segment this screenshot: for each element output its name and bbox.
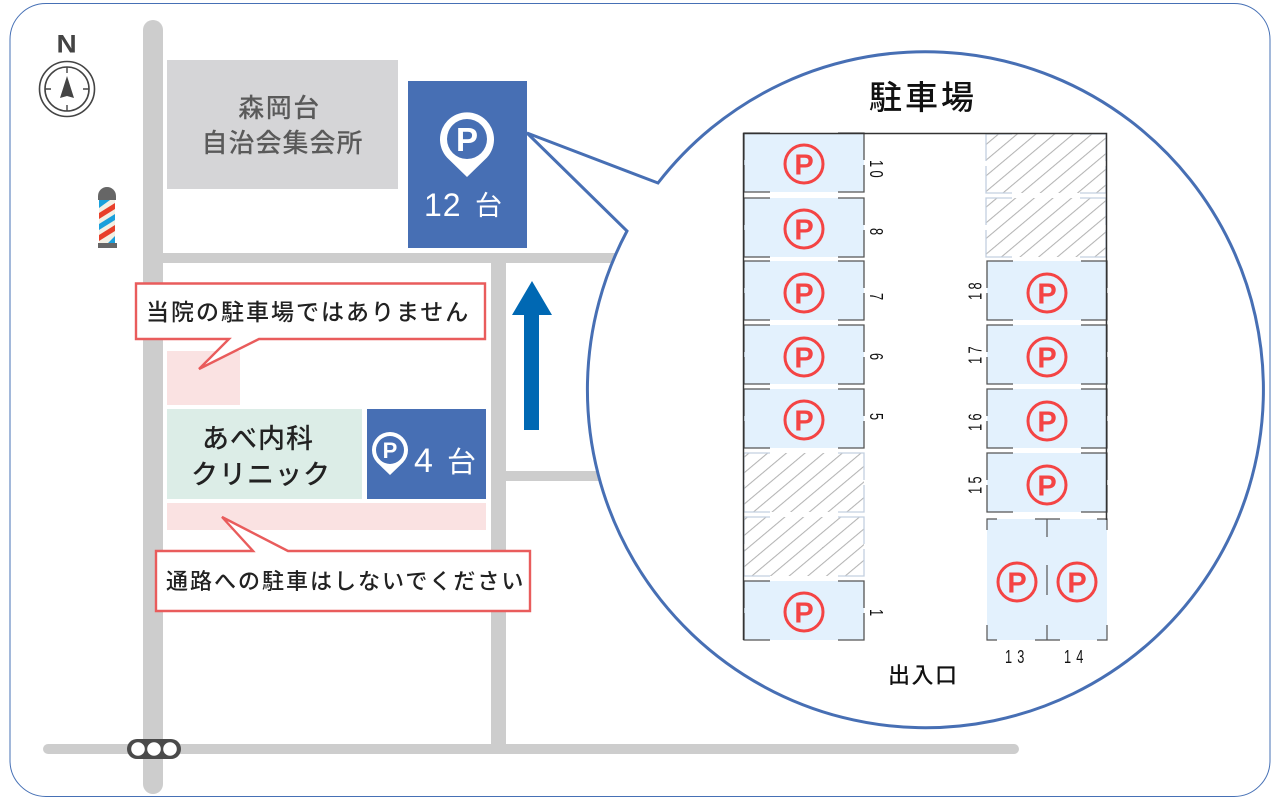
- icon: compass: [40, 30, 94, 116]
- stall 6: P: [794, 342, 814, 374]
- clinic building: あべ内科: [202, 424, 314, 454]
- stall 16: P: [1037, 406, 1057, 438]
- stall 5: P: [794, 406, 814, 438]
- stall 15: P: [1037, 470, 1057, 502]
- unavailable stall right upper: [986, 134, 1106, 193]
- stall numbers: 18: [966, 279, 986, 300]
- unavailable stall right lower: [986, 198, 1106, 257]
- no parking passage: [167, 503, 486, 530]
- community hall building: 森岡台: [238, 93, 321, 123]
- panel: 12 car parking: 12: [424, 187, 462, 223]
- stall numbers: 15: [966, 473, 986, 494]
- callout: not our parking: [136, 284, 485, 369]
- stall 17: P: [1037, 342, 1057, 374]
- stall numbers: 8: [865, 228, 885, 238]
- stall numbers: 16: [966, 410, 986, 431]
- icon: small parking pin: P: [383, 438, 397, 463]
- roads: [43, 20, 1019, 794]
- stall 18: P: [1037, 278, 1057, 310]
- detail circle: parking lot: [527, 52, 1263, 728]
- clinic building: [167, 409, 362, 499]
- arrow: direction of approach: [512, 281, 552, 430]
- unavailable stall left lower: [744, 517, 864, 576]
- lot boundary: [744, 134, 1106, 640]
- entrance label: 出入口: [888, 663, 959, 688]
- community hall building: [167, 60, 398, 189]
- stalls 13 and 14: [987, 519, 1107, 640]
- stall 8: P: [794, 214, 814, 246]
- clinic building: クリニック: [191, 460, 331, 490]
- icon: parking pin: P: [456, 121, 478, 158]
- stall 15: [987, 453, 1107, 512]
- stall 1: [744, 581, 864, 640]
- stall 1: P: [794, 598, 814, 630]
- no parking area upper: [167, 351, 240, 405]
- callout wedge to detail map: [527, 133, 658, 260]
- stall 5: [744, 389, 864, 448]
- stall 18: [987, 261, 1107, 320]
- heading: 駐車場: [869, 79, 977, 116]
- community hall building: 自治会集会所: [201, 128, 364, 158]
- stall 10: P: [794, 150, 814, 182]
- callout: not our parking: 当院の駐車場ではありません: [146, 299, 470, 325]
- callout: do not park in passage: 通路への駐車はしないでください: [166, 569, 525, 594]
- stalls 13 and 14: P: [1007, 568, 1027, 600]
- panel: 12 car parking: 台: [475, 191, 502, 221]
- stall 16: [987, 389, 1107, 448]
- stall numbers: 1: [865, 609, 885, 619]
- stalls 13 and 14: P: [1067, 568, 1087, 600]
- stall numbers: 5: [865, 413, 885, 423]
- stall 6: [744, 325, 864, 384]
- stall numbers: 7: [865, 293, 885, 303]
- stall 7: [744, 261, 864, 320]
- stall numbers: 10: [865, 160, 885, 181]
- stall numbers: 13: [1005, 648, 1029, 668]
- stall numbers: 17: [966, 343, 986, 364]
- panel: 4 car parking: 4: [414, 442, 433, 480]
- stall 17: [987, 325, 1107, 384]
- stall numbers: [865, 160, 1088, 668]
- stall 8: [744, 198, 864, 257]
- stall numbers: 14: [1064, 648, 1088, 668]
- icon: compass: N: [56, 30, 77, 58]
- panel: 12 car parking: [408, 81, 527, 248]
- unavailable stall left upper: [744, 453, 864, 512]
- panel: 4 car parking: [367, 409, 486, 499]
- panel: 4 car parking: 台: [447, 446, 476, 479]
- stall 10: [744, 133, 864, 192]
- icon: parking pin: [440, 112, 494, 177]
- traffic light: [127, 739, 181, 759]
- callout: do not park in passage: [156, 517, 530, 611]
- stall numbers: 6: [865, 353, 885, 363]
- icon: barber pole: [98, 187, 117, 248]
- stall 7: P: [794, 278, 814, 310]
